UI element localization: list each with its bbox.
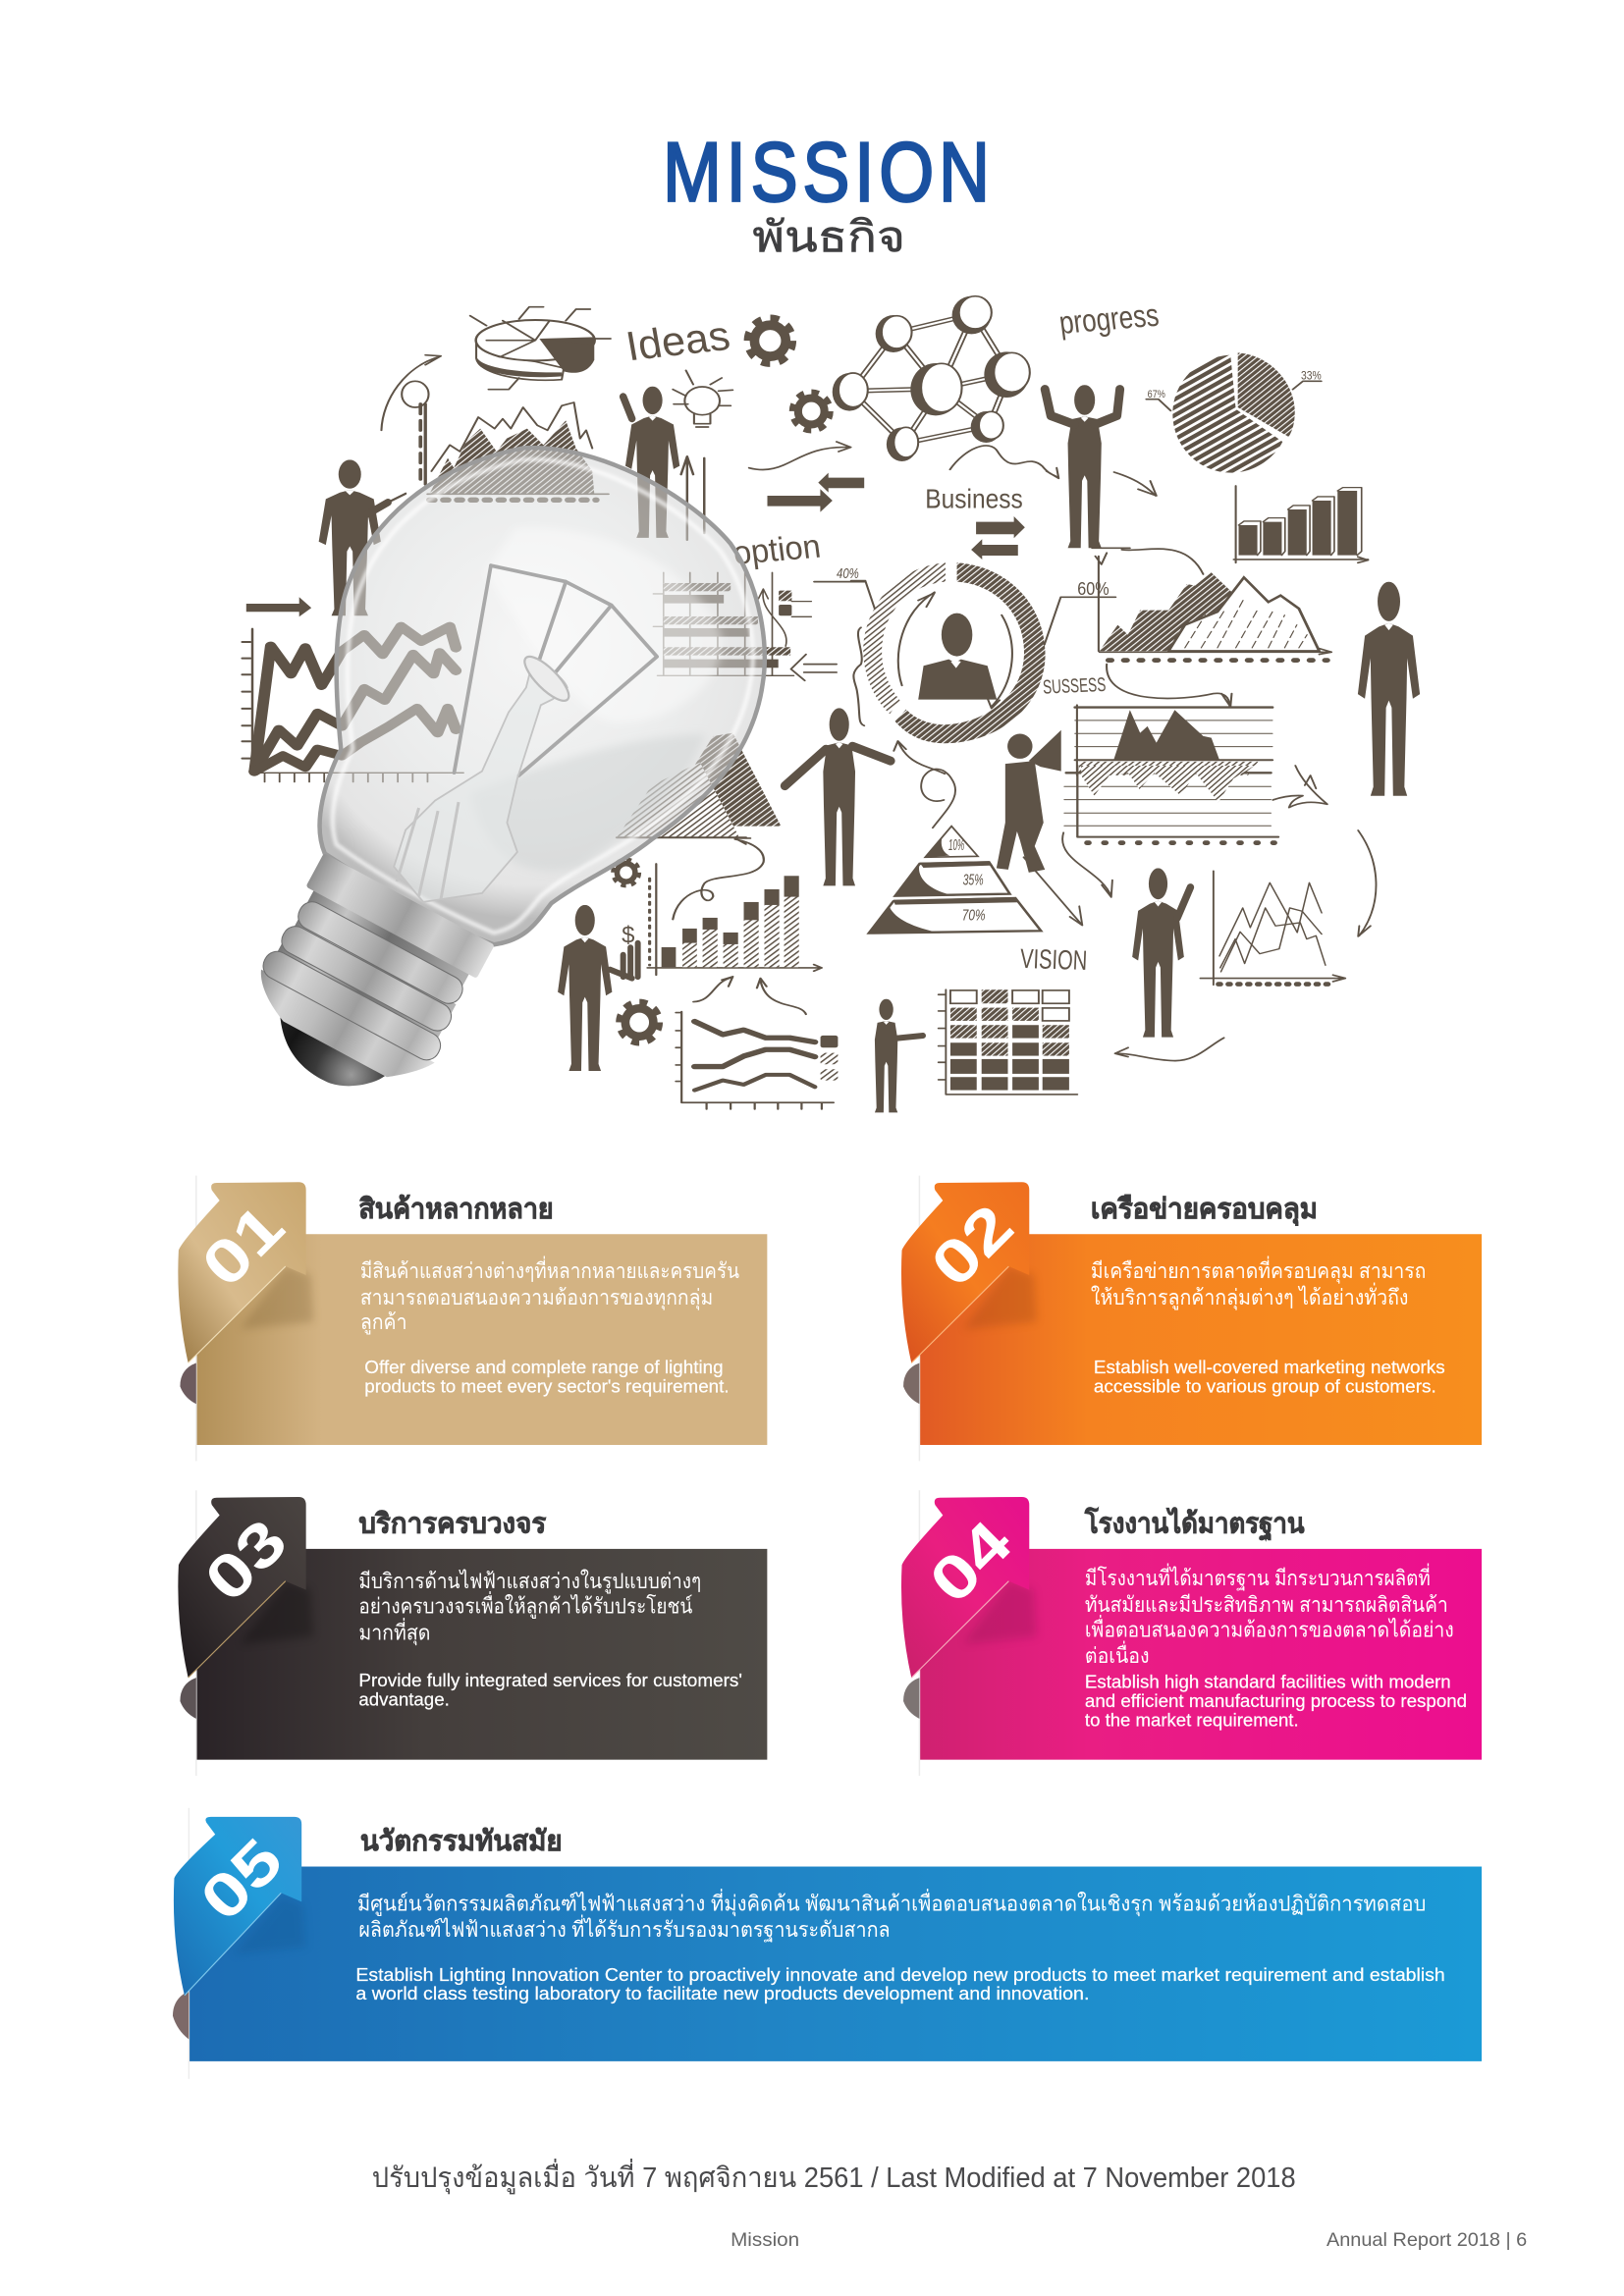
text 03 thai: อย่างครบวงจรเพื่อให้ลูกค้าได้รับประโยชน์ — [358, 1592, 693, 1620]
bracket — [853, 627, 864, 725]
number 02: 02 — [918, 1192, 1027, 1301]
number 05: 05 — [188, 1826, 296, 1934]
text 03 thai: มากที่สุด — [358, 1618, 430, 1645]
heading: Thai subtitle: พันธกิจ — [752, 214, 905, 261]
heading 01: สินค้าหลากหลาย — [358, 1194, 554, 1225]
arrow: decorative tip — [1272, 766, 1327, 808]
arrow: curve into ring — [893, 741, 945, 774]
pyramid: 10% — [948, 835, 964, 854]
upper-left sketches — [243, 307, 865, 774]
text 03 english — [358, 1670, 742, 1709]
panel 02: marketing network — [901, 1176, 1482, 1461]
panel 01 background — [196, 1234, 767, 1445]
panel 03 background — [196, 1549, 767, 1760]
chart: hatched pie: 33% — [1301, 369, 1322, 382]
text 03 english: Provide fully integrated services for customers' — [358, 1670, 742, 1690]
ribbon 02 — [901, 1182, 1029, 1362]
arrow: curved to chart — [1107, 665, 1231, 707]
number 04: 04 — [916, 1508, 1025, 1617]
panel 02 background — [919, 1234, 1482, 1445]
heading 04: โรงงานได้มาตรฐาน — [1084, 1506, 1305, 1541]
text 05 thai: มีศูนย์นวัตกรรมผลิตภัณฑ์ไฟฟ้าแสงสว่าง ที่มุ่งคิดค้น พัฒนาสินค้าเพื่อตอบสนองตลาดในเชิงรุก พร้อมด้วยห้องปฏิบัติการทดสอบ — [357, 1889, 1426, 1916]
pyramid: 70% — [962, 906, 986, 924]
text: Ideas: Ideas — [623, 312, 733, 369]
bulb filament wires — [455, 565, 657, 775]
ribbon 01 — [178, 1182, 306, 1362]
text: progress: progress — [1057, 297, 1161, 341]
arrow: wavy to person — [950, 446, 1058, 478]
panel 01: diverse products — [178, 1176, 767, 1461]
person: holding money chart: $ — [622, 923, 634, 949]
chart: mountain line chart with axis — [381, 355, 609, 500]
pyramid — [869, 827, 1041, 934]
chart: 3D pie — [470, 307, 611, 390]
heading 02: เครือข่ายครอบคลุม — [1091, 1194, 1318, 1226]
panel 05: innovation — [173, 1808, 1482, 2079]
footer: page label: Annual Report 2018 | 6 — [1326, 2229, 1527, 2251]
heading: MISSION: MISSION — [663, 125, 995, 219]
text: option: option — [731, 527, 823, 571]
ribbon 03 — [178, 1497, 306, 1678]
icon: gear middle — [792, 392, 831, 431]
chart: hatched pie: 67% — [1148, 387, 1165, 400]
title block — [663, 125, 995, 261]
illustration: business sketch and light bulb — [228, 296, 1420, 1123]
chart: 3D bars — [1234, 486, 1368, 562]
chart: thin lines — [1200, 871, 1345, 985]
text 02 thai: ให้บริการลูกค้ากลุ่มต่างๆ ได้อย่างทั่วถึง — [1091, 1283, 1408, 1310]
ribbon 05 — [174, 1817, 301, 1996]
text 05 english: Establish Lighting Innovation Center to proactively innovate and develop new products to meet market requirement and establish — [355, 1964, 1445, 1985]
text 01 english: products to meet every sector's requirement. — [364, 1375, 730, 1396]
person: holding money chart — [558, 905, 638, 1071]
number 01: 01 — [189, 1192, 298, 1301]
text 02 english: Establish well-covered marketing networks — [1094, 1357, 1445, 1377]
panel 04 background — [919, 1549, 1482, 1760]
text 04 thai: เพื่อตอบสนองความต้องการของตลาดได้อย่าง — [1085, 1615, 1454, 1641]
bulb highlight — [485, 528, 722, 722]
arrow: small — [1114, 472, 1157, 496]
footer: last modified: ปรับปรุงข้อมูลเมื่อ วันที่ 7 พฤศจิกายน 2561 / Last Modified at 7 November 2018 — [372, 2159, 1296, 2195]
text 01 thai: ลูกค้า — [360, 1309, 407, 1335]
bulb screw base — [228, 852, 497, 1123]
text 04 thai: มีโรงงานที่ได้มาตรฐาน มีกระบวนการผลิตที่ — [1085, 1564, 1431, 1591]
person: right lower standing — [1132, 868, 1190, 1038]
arrow: looped — [673, 838, 764, 920]
panel 03: integrated service — [178, 1490, 767, 1776]
chart: grid with peaks — [1075, 705, 1272, 775]
chart: table grid — [939, 989, 1077, 1095]
chart: hatched triangles — [617, 733, 781, 837]
person: tall standing — [1358, 582, 1420, 796]
text 05 thai — [357, 1889, 1426, 1943]
text 02 thai: มีเครือข่ายการตลาดที่ครอบคลุม สามารถ — [1091, 1256, 1426, 1284]
lower-left sketches — [251, 733, 838, 1109]
text 04 thai: ต่อเนื่อง — [1085, 1641, 1150, 1668]
person: walking with megaphone — [997, 730, 1061, 873]
chart: grid continuation — [1064, 766, 1278, 843]
person: lower centre presenter — [875, 999, 923, 1112]
footer: section name: Mission — [731, 2229, 799, 2251]
bulb stem — [394, 651, 574, 902]
arrows: small — [693, 977, 806, 1014]
legend swatches and curved arrow — [758, 589, 811, 646]
heading 05: นวัตกรรมทันสมัย — [360, 1826, 563, 1857]
axis ticks under chart — [251, 773, 463, 782]
text 03 english: advantage. — [358, 1688, 450, 1709]
ribbon 04 — [901, 1497, 1029, 1678]
text 03 thai — [358, 1569, 701, 1645]
content panels and footer — [173, 1176, 1527, 2251]
text: VISION: VISION — [1019, 943, 1088, 977]
text 02 english: accessible to various group of customers. — [1094, 1375, 1436, 1396]
text 04 thai — [1085, 1564, 1454, 1668]
arrow: right block — [246, 597, 311, 616]
text 04 thai: ทันสมัยและมีประสิทธิภาพ สามารถผลิตสินค้า — [1085, 1592, 1448, 1617]
icon: gear small — [613, 859, 639, 885]
leader: 60%: 60% — [1077, 579, 1110, 599]
arrow: left double — [791, 655, 837, 680]
text 01 thai: มีสินค้าแสงสว่างต่างๆที่หลากหลายและครบครัน — [360, 1256, 739, 1283]
person: standing with raised hand — [623, 387, 679, 538]
text 01 thai: สามารถตอบสนองความต้องการของทุกกลุ่ม — [360, 1285, 713, 1310]
panel 04: factory standard — [901, 1490, 1482, 1776]
text 03 thai: มีบริการด้านไฟฟ้าแสงสว่างในรูปแบบต่างๆ — [358, 1569, 701, 1594]
arrow: up and line — [681, 456, 704, 540]
number 03: 03 — [191, 1507, 300, 1615]
heading 03: บริการครบวงจร — [358, 1508, 547, 1539]
text 05 english: a world class testing laboratory to facilitate new products development and innovation. — [355, 1983, 1089, 2003]
lower-right sketches — [869, 766, 1376, 1095]
pyramid: 35% — [963, 871, 984, 888]
icon: gear large top — [747, 318, 793, 363]
text 05 thai: ผลิตภัณฑ์ไฟฟ้าแสงสว่าง ที่ได้รับการรับรองมาตรฐานระดับสากล — [358, 1915, 891, 1943]
chart: stacked bars — [647, 864, 822, 975]
icon: gear bottom — [619, 1002, 660, 1042]
text: SUSSESS: SUSSESS — [1042, 674, 1107, 699]
light bulb — [228, 448, 765, 1123]
bulb shaded band — [470, 734, 705, 871]
person: arms raised — [1045, 385, 1120, 548]
chart: three lines — [676, 1012, 838, 1109]
chart: mountains — [1100, 572, 1331, 661]
text 02 english — [1094, 1357, 1445, 1396]
text: Business: Business — [925, 483, 1023, 514]
text 04 english: Establish high standard facilities with modern — [1085, 1672, 1451, 1692]
panel 05 background — [189, 1867, 1482, 2061]
arrow: exchange — [768, 473, 864, 512]
text 02 thai — [1091, 1256, 1426, 1310]
bulb glass — [320, 448, 765, 944]
text 01 english — [364, 1357, 730, 1396]
icon: idea bulb sketch — [673, 370, 732, 427]
network diagram — [833, 296, 1030, 461]
arrows and loop — [921, 770, 1376, 1061]
upper-right sketches — [833, 296, 1368, 775]
leader: 40%: 40% — [837, 565, 859, 582]
leader: 40% — [814, 565, 865, 582]
text 04 english — [1085, 1672, 1467, 1730]
chart: ring with person — [863, 562, 1046, 743]
chart: horizontal bars — [653, 572, 793, 675]
arrow: small curved — [749, 442, 851, 470]
text 04 english: to the market requirement. — [1085, 1709, 1299, 1730]
text 01 english: Offer diverse and complete range of lighting — [364, 1357, 724, 1377]
text 01 thai — [360, 1256, 739, 1335]
text 04 english: and efficient manufacturing process to respond — [1085, 1690, 1467, 1711]
person: presenter with pointer — [319, 459, 406, 615]
arrow: business exchange — [971, 516, 1025, 560]
bulb inner rim — [333, 459, 753, 933]
chart: hatched pie — [1146, 352, 1322, 473]
leader: 60% — [851, 548, 1203, 651]
text 05 english — [355, 1964, 1445, 2003]
chart: left zigzag lines — [243, 626, 456, 774]
person: pointing centre — [785, 708, 891, 885]
